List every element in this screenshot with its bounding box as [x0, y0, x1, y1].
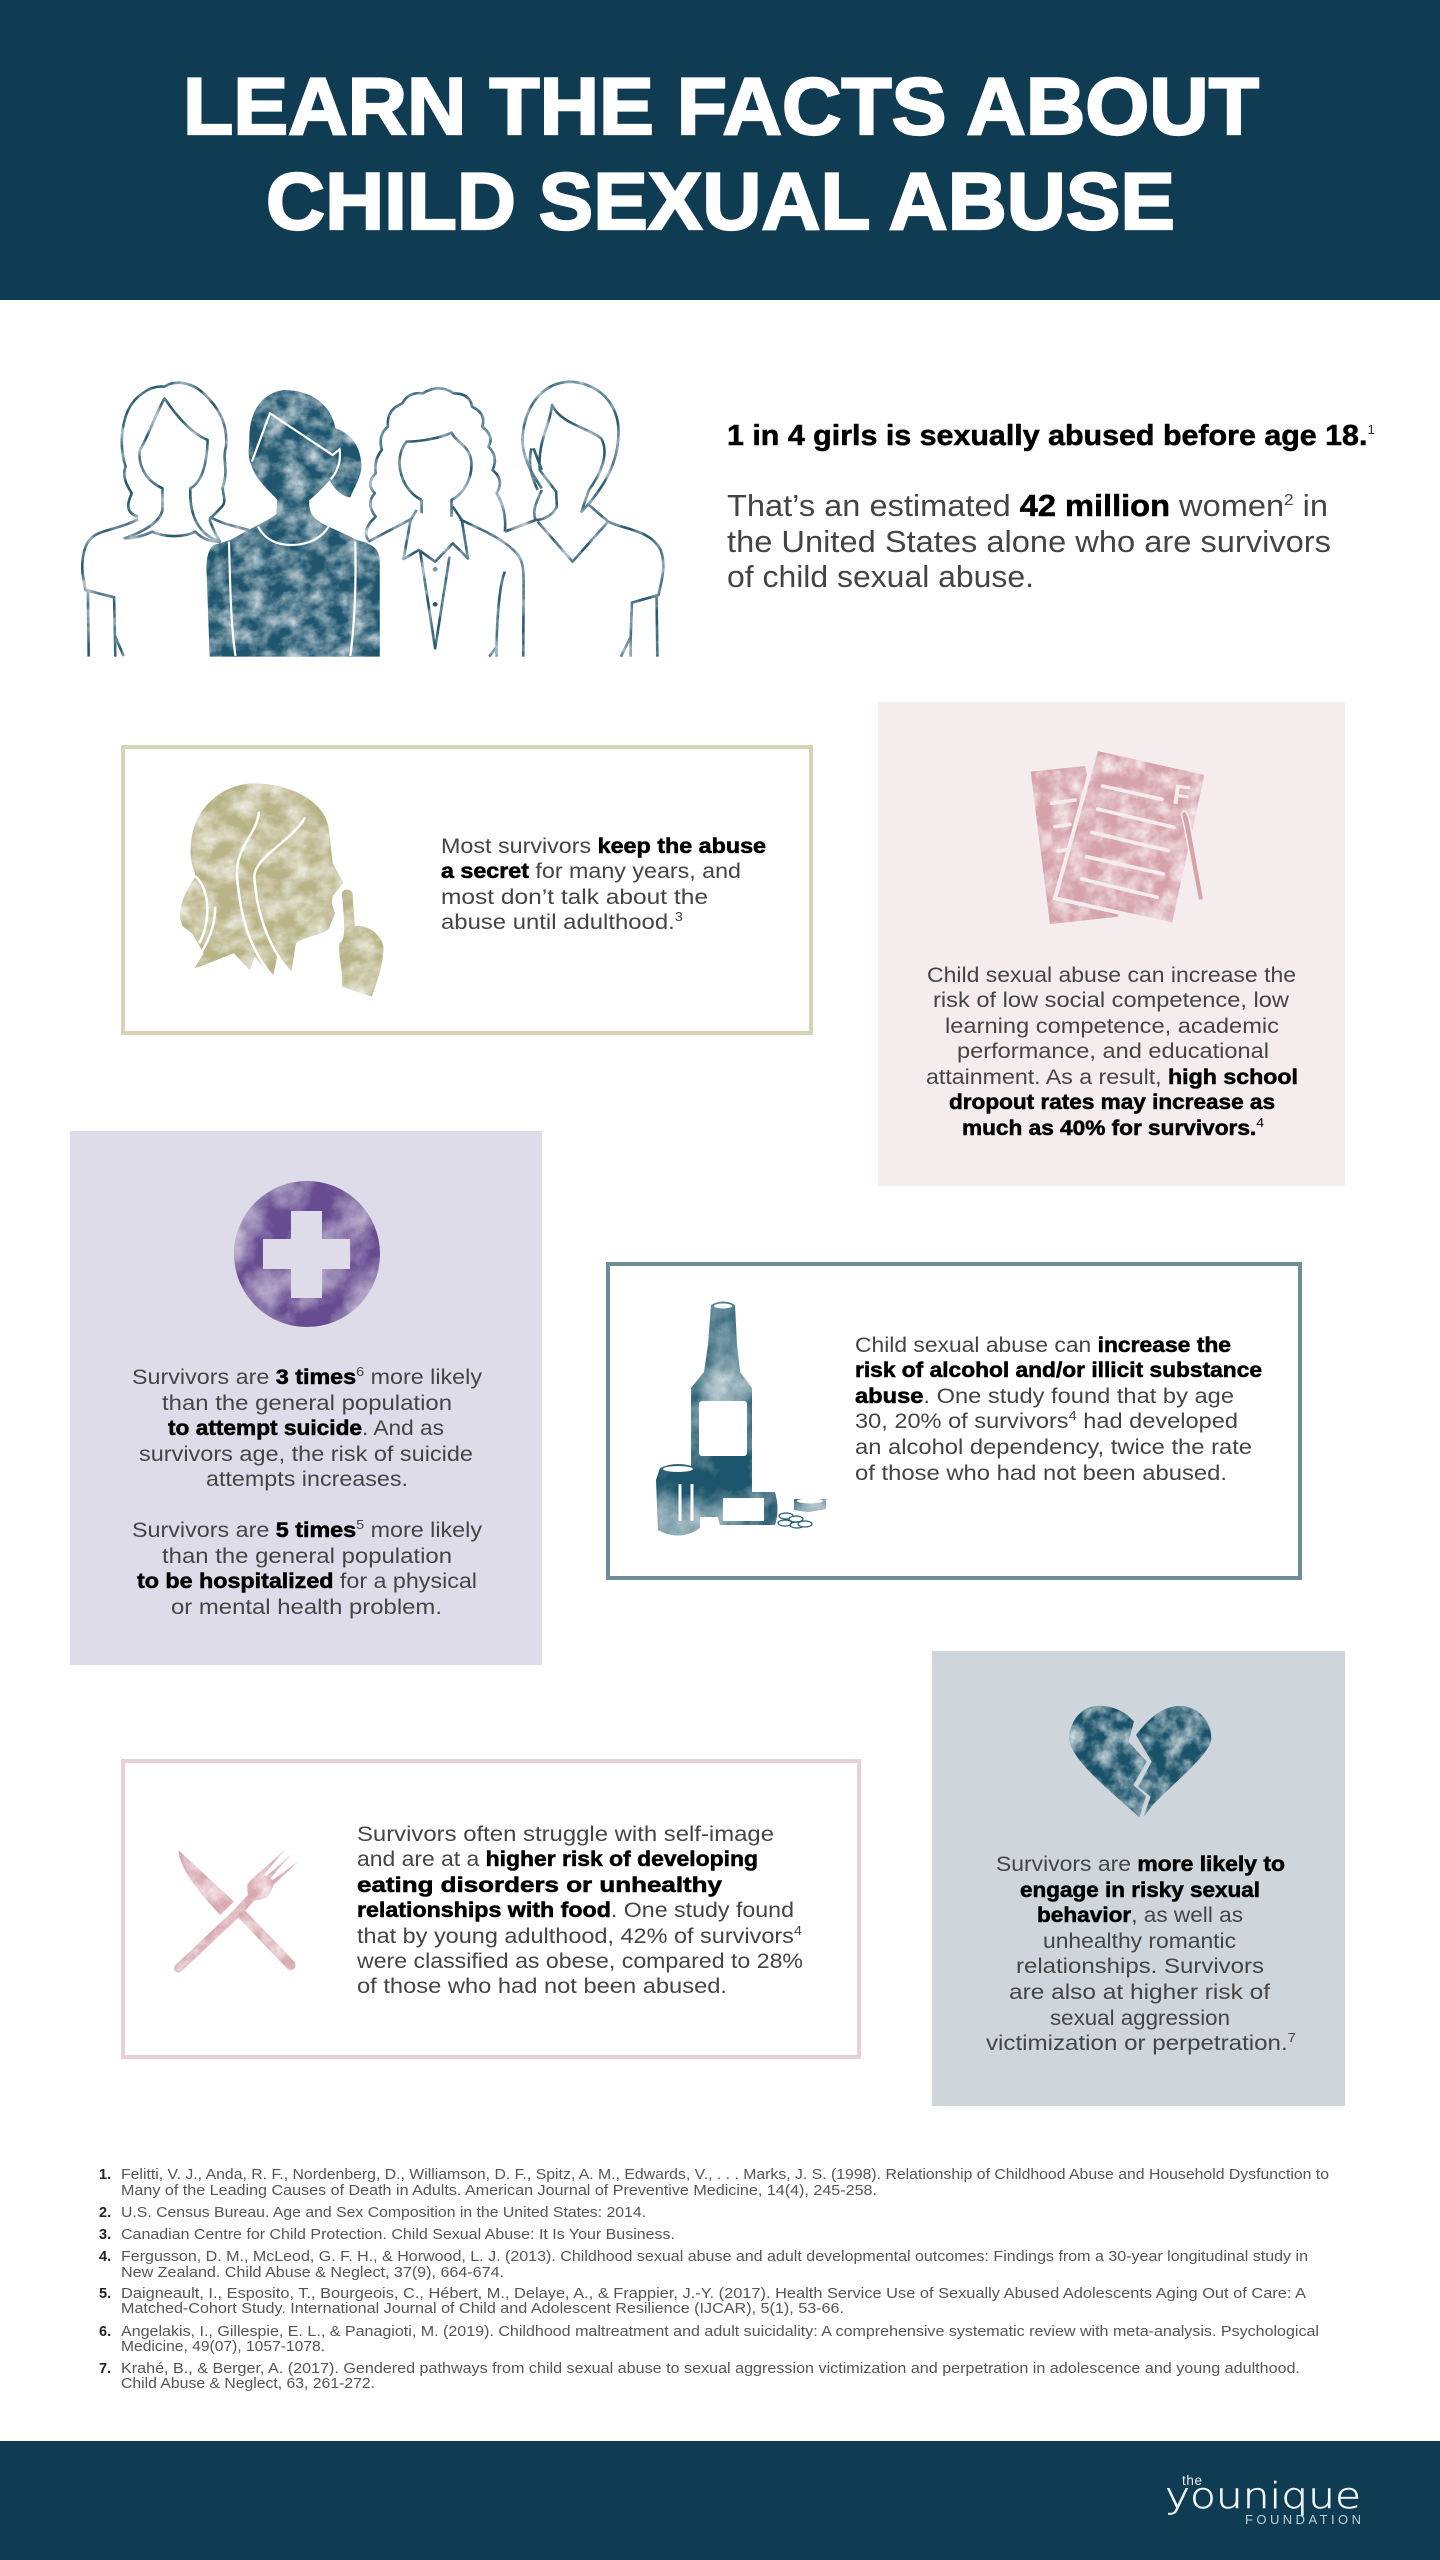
title: CHILD SEXUAL ABUSE — [266, 157, 1175, 247]
icon: crossed knife and fork — [178, 1849, 298, 1968]
header banner — [0, 0, 1440, 300]
panel: health — [70, 1131, 542, 1665]
references: Canadian Centre for Child Protection. Child Sexual Abuse: It Is Your Business. — [121, 2227, 675, 2243]
filled woman — [206, 390, 380, 657]
substance abuse text: Child sexual abuse can increase the — [855, 1334, 1231, 1357]
relationships text: are also at higher risk of — [1009, 1981, 1270, 2004]
relationships text: victimization or perpetration. — [986, 2032, 1249, 2055]
relationships text: engage in risky sexual — [1020, 1879, 1260, 1902]
suicide risk text: more likely — [364, 1366, 483, 1389]
food text: relationships with food . One study found — [357, 1899, 794, 1922]
substance abuse text: an alcohol dependency, twice the rate — [855, 1436, 1252, 1459]
panel: self-image and food — [123, 1761, 859, 2057]
references: Angelakis, I., Gillespie, E. L., & Panagioti, M. (2019). Childhood maltreatment and adult suicidality: A comprehensive systematic review with meta-analysis. Psychological — [121, 2324, 1319, 2340]
food text: Survivors often struggle with self-image — [357, 1823, 774, 1846]
intro text — [727, 420, 1375, 594]
icon: girl with finger to lips — [180, 783, 383, 997]
substance abuse text: 30, 20% of survivors — [855, 1410, 1045, 1433]
references: 5. — [99, 2286, 111, 2302]
title — [183, 62, 1259, 247]
references: Many of the Leading Causes of Death in Adults. American Journal of Preventive Medicine, 14(4), 245-258. — [121, 2183, 877, 2199]
education text: risk of low social competence, low — [933, 989, 1290, 1012]
substance abuse text: abuse . One study found that by age — [855, 1385, 1234, 1408]
food text: of those who had not been abused. — [357, 1975, 727, 1998]
references: Felitti, V. J., Anda, R. F., Nordenberg, D., Williamson, D. F., Spitz, A. M., Edwards, V., . . . Marks, J. S. (1998). Relationship of Childhood Abuse and Household Dysfunction to — [121, 2167, 1329, 2183]
illustration: four women — [82, 382, 663, 657]
outlined women — [82, 382, 663, 657]
secrecy text: most don’t talk about the — [441, 886, 708, 909]
food text: and are at a higher risk of developing — [357, 1848, 758, 1871]
education text: much as 40% for survivors. — [962, 1117, 1235, 1140]
relationships text: Survivors are more likely to — [996, 1853, 1285, 1876]
suicide risk text: Survivors are 3 times — [132, 1366, 348, 1389]
panel: secrecy — [123, 747, 811, 1033]
headline statistic: 1 in 4 girls is sexually abused before age 18. — [727, 420, 1338, 452]
supporting statement: 2 — [1284, 492, 1294, 509]
suicide risk text: survivors age, the risk of suicide — [139, 1443, 473, 1466]
grade letter: F — [1171, 779, 1192, 812]
secrecy text — [441, 835, 766, 934]
relationships text: relationships. Survivors — [1016, 1955, 1264, 1978]
references: 3. — [99, 2227, 111, 2243]
references: New Zealand. Child Abuse & Neglect, 37(9), 664-674. — [121, 2265, 504, 2281]
education text: Child sexual abuse can increase the — [927, 964, 1296, 987]
substance abuse text — [855, 1334, 1262, 1485]
secrecy text: abuse until adulthood. — [441, 911, 646, 934]
substance abuse text: risk of alcohol and/or illicit substance — [855, 1359, 1262, 1382]
supporting statement: the United States alone who are survivors — [727, 525, 1331, 559]
panel: relationships — [932, 1651, 1345, 2106]
hospitalization text: or mental health problem. — [171, 1596, 442, 1619]
logo: the younique foundation — [1165, 2473, 1361, 2527]
hospitalization text — [132, 1517, 483, 1619]
hospitalization text: Survivors are 5 times — [132, 1519, 348, 1542]
references: 6. — [99, 2324, 111, 2340]
supporting statement: That’s an estimated 42 million women — [727, 489, 1277, 523]
relationships text — [986, 1853, 1296, 2055]
food text — [356, 1823, 803, 1998]
icon: broken heart — [1069, 1706, 1211, 1817]
hospitalization text: 5 — [356, 1517, 364, 1532]
relationships text: 7 — [1288, 2030, 1296, 2045]
substance abuse text: 4 — [1069, 1408, 1077, 1423]
relationships text: unhealthy romantic — [1043, 1930, 1236, 1953]
references: Krahé, B., & Berger, A. (2017). Gendered pathways from child sexual abuse to sexual aggression victimization and perpetration in adolescence and young adulthood. — [121, 2361, 1300, 2377]
panel: substance abuse — [608, 1264, 1300, 1578]
headline statistic: 1 — [1367, 422, 1375, 437]
education text: learning competence, academic — [945, 1015, 1279, 1038]
secrecy text: 3 — [675, 909, 683, 924]
references: Child Abuse & Neglect, 63, 261-272. — [121, 2376, 375, 2392]
suicide risk text: attempts increases. — [206, 1468, 408, 1491]
references: 7. — [99, 2361, 111, 2377]
references — [99, 2167, 1329, 2392]
suicide risk text — [132, 1364, 483, 1491]
substance abuse text: of those who had not been abused. — [855, 1462, 1227, 1485]
education text: performance, and educational — [957, 1040, 1269, 1063]
icon: bottle, can and pills — [656, 1302, 826, 1536]
hospitalization text: more likely — [364, 1519, 483, 1542]
secrecy text: a secret for many years, and — [441, 860, 741, 883]
food text: that by young adulthood, 42% of survivors — [357, 1925, 748, 1948]
references: 2. — [99, 2205, 111, 2221]
suicide risk text: to attempt suicide . And as — [168, 1417, 444, 1440]
icon: medical cross — [234, 1181, 380, 1327]
icon: failed test papers — [1031, 751, 1204, 924]
hospitalization text: than the general population — [162, 1545, 452, 1568]
title: LEARN THE FACTS ABOUT — [183, 62, 1259, 152]
substance abuse text: had developed — [1077, 1410, 1238, 1433]
suicide risk text: than the general population — [162, 1392, 452, 1415]
references: Daigneault, I., Esposito, T., Bourgeois, C., Hébert, M., Delaye, A., & Frappier, J.-Y. (2017). Health Service Use of Sexually Abused Adolescents Aging Out of Care: A — [121, 2286, 1306, 2302]
hospitalization text: to be hospitalized for a physical — [137, 1570, 477, 1593]
pencil — [1181, 811, 1204, 901]
suicide risk text: 6 — [356, 1364, 364, 1379]
education text: dropout rates may increase as — [949, 1091, 1275, 1114]
logo: the younique foundation: FOUNDATION — [1245, 2512, 1361, 2527]
references: Matched-Cohort Study. International Journal of Child and Adolescent Resilience (IJCAR), 5(1), 53-66. — [121, 2301, 844, 2317]
logo: the younique foundation: the — [1182, 2473, 1202, 2488]
secrecy text: Most survivors keep the abuse — [441, 835, 766, 858]
education text: 4 — [1256, 1115, 1264, 1130]
panel: education — [878, 702, 1345, 1186]
supporting statement — [727, 489, 1331, 594]
food text: eating disorders or unhealthy — [357, 1874, 722, 1897]
references: 4. — [99, 2249, 111, 2265]
supporting statement: of child sexual abuse. — [727, 560, 1034, 594]
education text: attainment. As a result, high school — [926, 1066, 1298, 1089]
education text — [926, 964, 1298, 1140]
relationships text: sexual aggression — [1050, 2007, 1230, 2030]
references: Fergusson, D. M., McLeod, G. F. H., & Horwood, L. J. (2013). Childhood sexual abuse and adult developmental outcomes: Findings from a 30-year longitudinal study in — [121, 2249, 1308, 2265]
food text: 4 — [794, 1923, 802, 1938]
logo: the younique foundation: younique — [1165, 2476, 1361, 2517]
footer banner — [0, 2441, 1440, 2560]
references: Medicine, 49(07), 1057-1078. — [121, 2339, 325, 2355]
food text: were classified as obese, compared to 28% — [356, 1950, 803, 1973]
references: 1. — [99, 2167, 111, 2183]
references: U.S. Census Bureau. Age and Sex Composition in the United States: 2014. — [121, 2205, 646, 2221]
supporting statement: in — [1294, 489, 1328, 523]
relationships text: behavior , as well as — [1037, 1904, 1243, 1927]
